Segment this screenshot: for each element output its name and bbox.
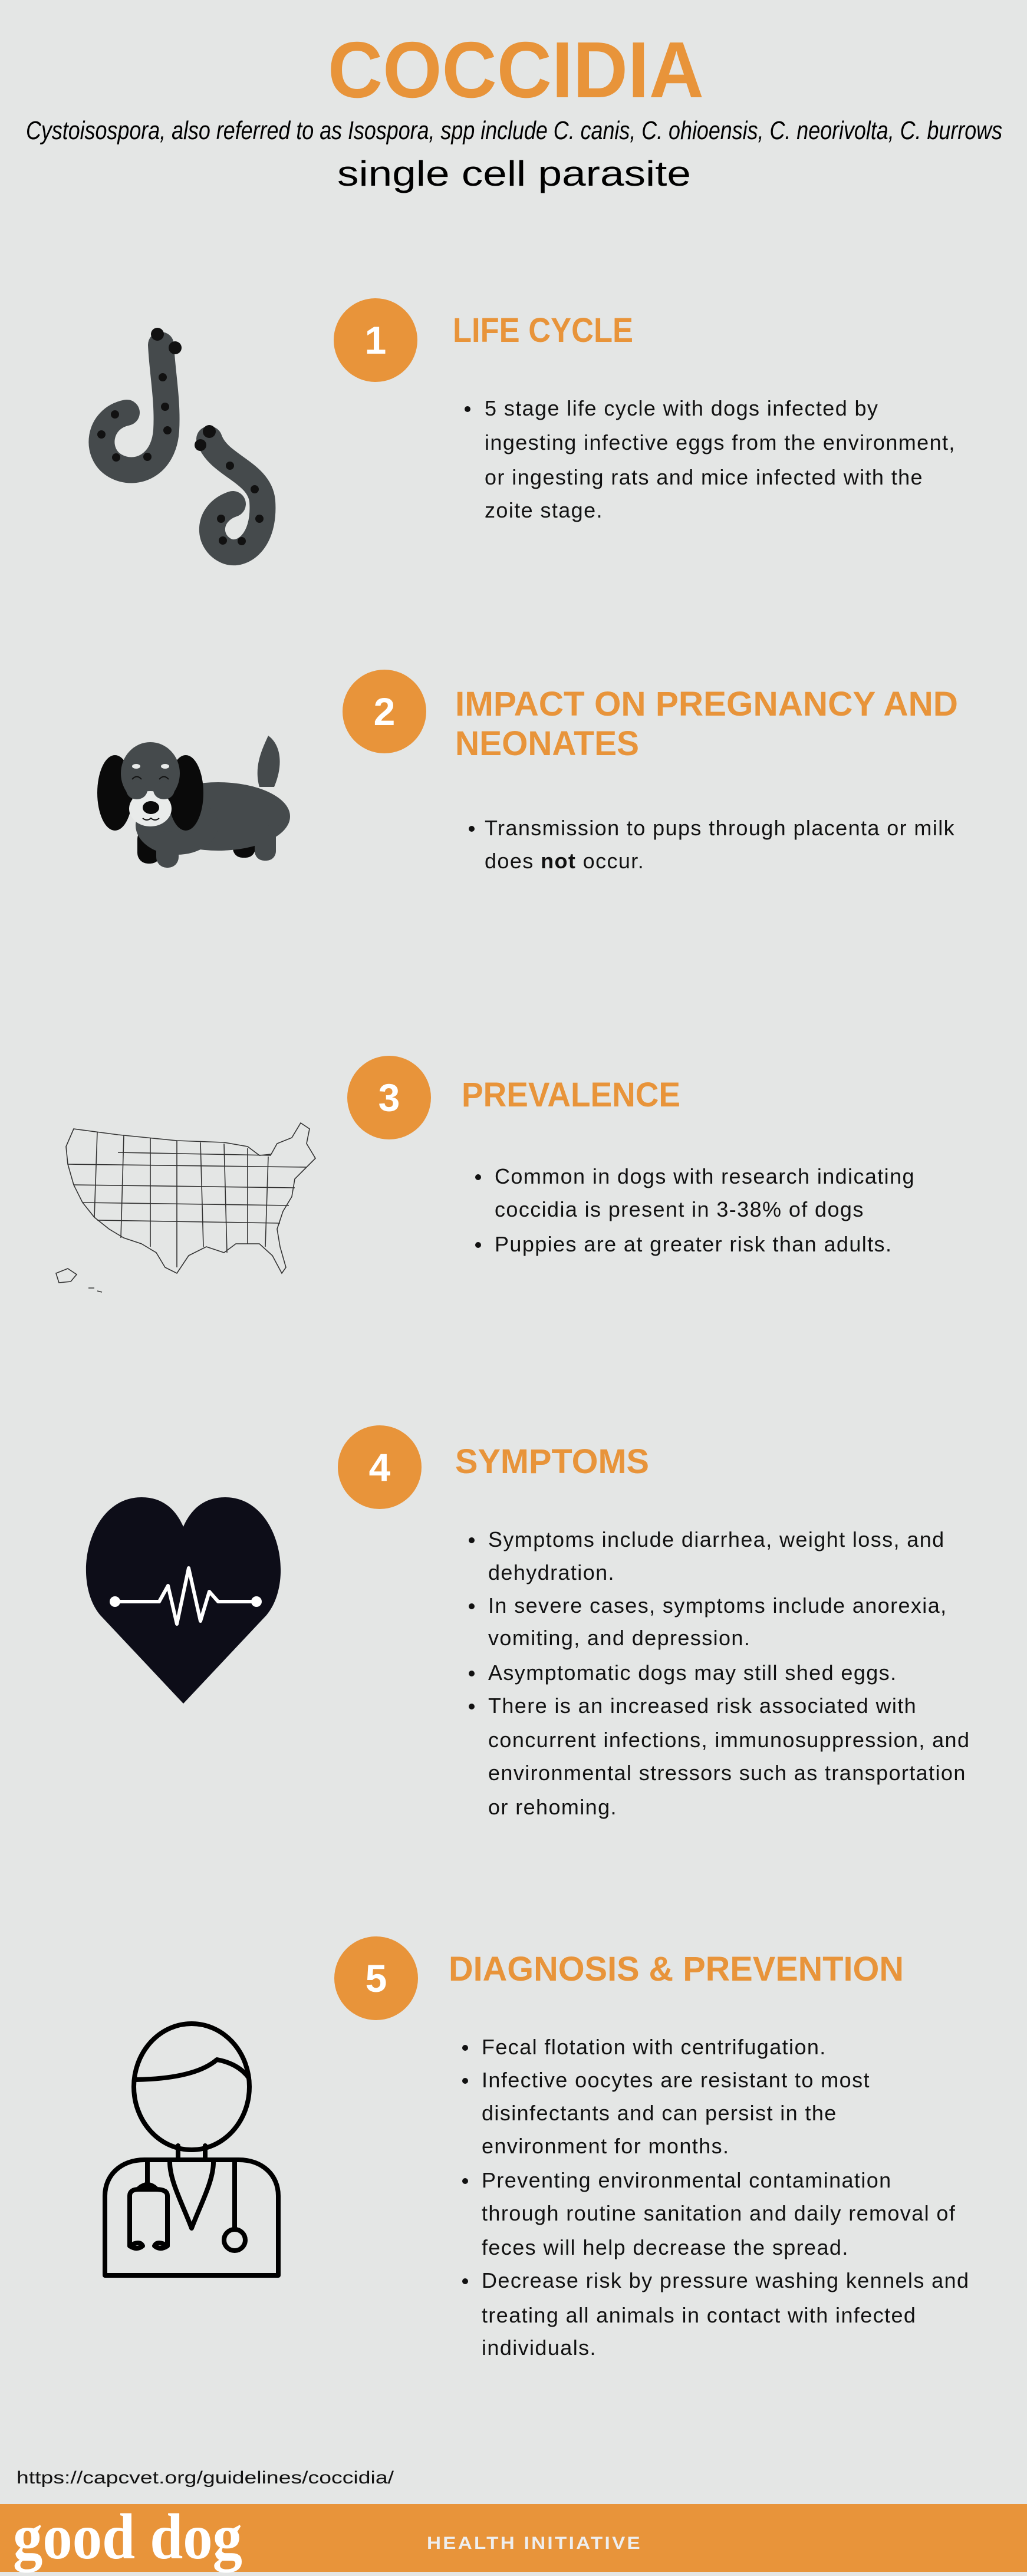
- bullets: symptoms: or rehoming.: [488, 1795, 617, 1819]
- bullets: prevalence: coccidia is present in 3-38% of dogs: [495, 1197, 864, 1221]
- bullets: diagnosis: disinfectants and can persist in the: [482, 2101, 837, 2125]
- bullets: prevalence: Common in dogs with research indicating: [495, 1164, 915, 1188]
- logo: good dog: good dog: [13, 2501, 242, 2572]
- heading: pregnancy: IMPACT ON PREGNANCY AND: [455, 685, 958, 723]
- bullets: symptoms: vomiting, and depression.: [488, 1626, 750, 1650]
- heading: symptoms: SYMPTOMS: [455, 1442, 649, 1481]
- panel: life cycle: [97, 298, 956, 552]
- bullets: life cycle: zoite stage.: [485, 498, 603, 522]
- footer tagline: HEALTH INITIATIVE: [427, 2534, 642, 2553]
- bullets: symptoms: There is an increased risk associated with: [488, 1694, 917, 1718]
- icon: doctor: [105, 2024, 278, 2275]
- bullets: pregnancy: does not occur.: [485, 849, 644, 873]
- bullets: prevalence: Puppies are at greater risk than adults.: [495, 1232, 892, 1256]
- tagline: single cell parasite: [337, 154, 691, 193]
- number badge 5: [334, 1936, 418, 2020]
- icon: US map: [56, 1123, 315, 1292]
- bullets: life cycle: [465, 396, 956, 522]
- bullets: symptoms: Asymptomatic dogs may still shed eggs.: [488, 1661, 897, 1685]
- bullets: symptoms: dehydration.: [488, 1560, 615, 1585]
- number badge 2: [343, 670, 426, 753]
- heading: pregnancy: NEONATES: [455, 724, 639, 763]
- number badge 3: 3: [378, 1076, 400, 1119]
- number badge 4: 4: [369, 1445, 391, 1489]
- bullets: diagnosis: individuals.: [482, 2335, 597, 2360]
- bullets: life cycle: or ingesting rats and mice infected with the: [485, 465, 923, 489]
- bullets: symptoms: Symptoms include diarrhea, weight loss, and: [488, 1527, 945, 1551]
- bullets: diagnosis: Infective oocytes are resistant to most: [482, 2068, 870, 2092]
- bullets: diagnosis: [462, 2035, 969, 2360]
- bullets: pregnancy: [469, 816, 955, 873]
- number badge 4: [338, 1425, 422, 1509]
- heading: prevalence: PREVALENCE: [462, 1076, 680, 1114]
- number badge 3: [347, 1056, 431, 1139]
- number badge 2: 2: [374, 690, 395, 733]
- source url: https://capcvet.org/guidelines/coccidia/: [17, 2468, 394, 2488]
- bullets: symptoms: [469, 1527, 970, 1819]
- bullets: symptoms: In severe cases, symptoms include anorexia,: [488, 1593, 947, 1618]
- heading: pregnancy: [455, 685, 958, 763]
- number badge 1: [334, 298, 417, 382]
- heading: diagnosis: DIAGNOSIS & PREVENTION: [449, 1950, 904, 1988]
- panel: diagnosis: [105, 1936, 969, 2360]
- footer bar: [0, 2501, 1027, 2572]
- bullets: diagnosis: through routine sanitation and daily removal of: [482, 2201, 956, 2225]
- bullets: prevalence: [475, 1164, 915, 1256]
- number badge 5: 5: [366, 1956, 387, 2000]
- bullets: diagnosis: feces will help decrease the spread.: [482, 2235, 849, 2259]
- icon: heart with pulse: [86, 1497, 281, 1704]
- panel: symptoms: [86, 1425, 970, 1819]
- bullets: diagnosis: treating all animals in contact with infected: [482, 2303, 916, 2327]
- icon: dachshund: [97, 736, 290, 868]
- title: COCCIDIA: [328, 25, 704, 114]
- panel: pregnancy: [97, 670, 958, 873]
- bullets: diagnosis: environment for months.: [482, 2134, 729, 2158]
- number badge 1: 1: [365, 318, 386, 362]
- heading: life cycle: LIFE CYCLE: [453, 311, 633, 350]
- bullets: diagnosis: Decrease risk by pressure washing kennels and: [482, 2268, 969, 2292]
- bullets: diagnosis: Preventing environmental contamination: [482, 2168, 892, 2192]
- bullets: life cycle: ingesting infective eggs from the environment,: [485, 430, 956, 454]
- icon: worms: [97, 328, 264, 552]
- bullets: life cycle: 5 stage life cycle with dogs infected by: [485, 396, 878, 420]
- bullets: diagnosis: Fecal flotation with centrifugation.: [482, 2035, 827, 2059]
- bullets: pregnancy: Transmission to pups through placenta or milk: [485, 816, 955, 840]
- bullets: symptoms: environmental stressors such as transportation: [488, 1761, 966, 1785]
- panel: prevalence: [56, 1056, 915, 1292]
- bullets: symptoms: concurrent infections, immunosuppression, and: [488, 1728, 970, 1752]
